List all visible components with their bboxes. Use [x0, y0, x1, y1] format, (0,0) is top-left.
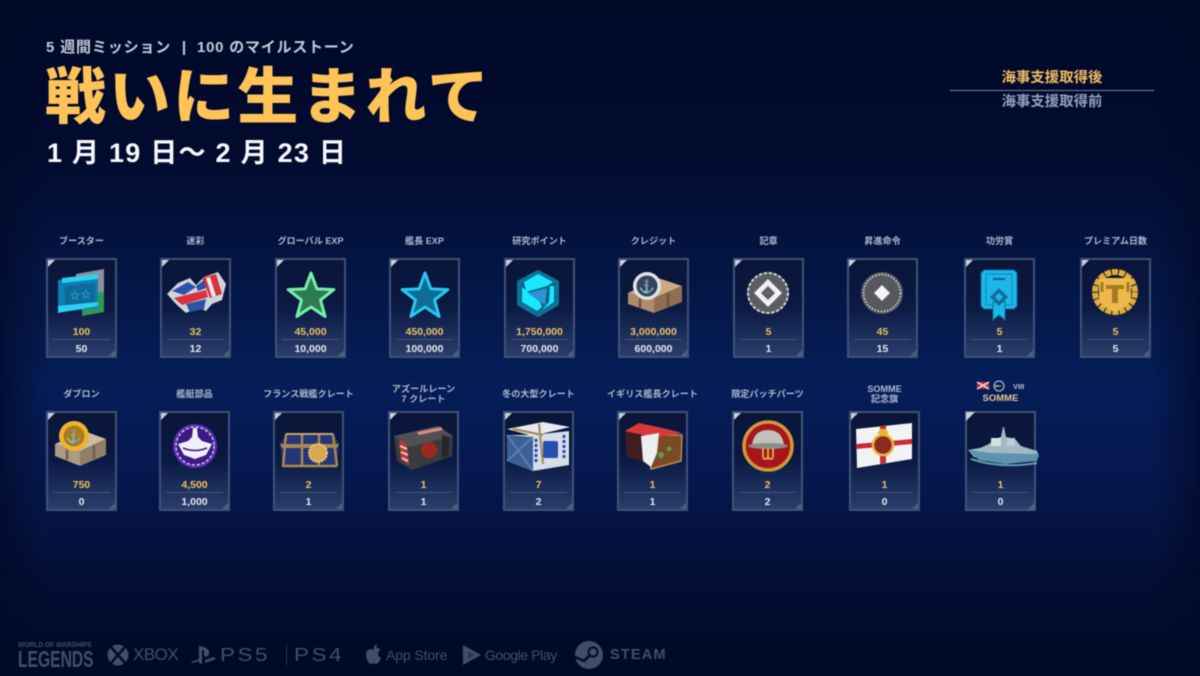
icon: ship components badge [172, 423, 218, 468]
logo: PlayStation 5 and 4: PS5 [220, 645, 270, 665]
reward: promotion orders [846, 235, 918, 358]
reward: premium days [1080, 235, 1152, 358]
icon: promotion order [860, 272, 904, 314]
reward: French battleship crate: 1 [306, 496, 311, 508]
reward: global EXP [274, 236, 346, 358]
reward: Somme commemorative flag: 0 [882, 496, 887, 508]
logo: World of Warships Legends: LEGENDS [18, 646, 94, 672]
icon: booster flags [57, 268, 105, 316]
icon: medal [746, 271, 790, 315]
logo: Xbox: XBOX [133, 645, 178, 664]
reward: French battleship crate: 2 [306, 479, 311, 491]
reward: commander EXP: 450,000 [406, 326, 443, 338]
icon: blue star [400, 270, 450, 319]
reward: doubloons [46, 388, 118, 512]
ship tier and name label [976, 380, 1024, 404]
reward: commander EXP [388, 236, 460, 358]
logo: World of Warships Legends: WORLD OF WARSHIPS [18, 642, 92, 649]
platform logos footer [18, 640, 668, 670]
legend: after support: 海事支援取得後 [1002, 70, 1102, 86]
reward: merit award: 5 [997, 326, 1002, 338]
legend: divider line [950, 90, 1154, 91]
icon: doubloons crate: ⚓ [66, 429, 82, 444]
subtitle [46, 38, 354, 56]
reward: camouflage: 32 [190, 326, 201, 338]
reward: French battleship crate: フランス戦艦クレート [263, 389, 354, 399]
reward: ship components: 艦艇部品 [176, 389, 213, 399]
reward: British commander crate: イギリス艦長クレート [607, 389, 698, 399]
reward: camouflage [160, 236, 232, 358]
icon: green star [286, 270, 336, 319]
reward: doubloons: 0 [79, 496, 84, 508]
legend [950, 68, 1154, 110]
reward: promotion orders: 45 [877, 326, 888, 338]
reward: camouflage: 12 [190, 343, 201, 355]
reward: doubloons: ダブロン [63, 389, 100, 399]
title: 戦いに生まれて [45, 63, 492, 131]
reward: British commander crate: 1 [650, 496, 655, 508]
reward: Azur Lane 7 crate: 1 [421, 479, 426, 491]
legend: before support: 海事支援取得前 [1002, 94, 1102, 110]
reward: Somme commemorative flag [848, 384, 920, 512]
reward: promotion orders: 昇進命令 [864, 236, 901, 246]
ship tier and name label: VIII [1012, 382, 1024, 391]
reward: winter large crate: 冬の大型クレート [502, 389, 575, 399]
reward: ship Somme [964, 380, 1040, 512]
reward: ship components: 4,500 [181, 479, 208, 491]
icon: destroyer Somme [965, 411, 1045, 481]
logo: Google Play [462, 644, 560, 666]
reward: medals: 5 [766, 326, 771, 338]
reward: camouflage: 迷彩 [186, 236, 205, 246]
icon: credits crate: ⚓ [639, 279, 655, 294]
subtitle: 5 週間ミッション [46, 39, 171, 56]
reward: premium days: プレミアム日数 [1084, 236, 1147, 246]
logo: App Store [365, 644, 449, 666]
reward: Somme commemorative flag: 記念旗 [871, 394, 898, 404]
reward: British commander crate [607, 388, 698, 512]
logo: PlayStation 5 and 4 [190, 644, 352, 666]
reward: research points [504, 235, 576, 358]
reward: global EXP: グローバル EXP [277, 236, 344, 246]
icon: credits crate [627, 271, 683, 314]
subtitle: 100 のマイルストーン [197, 39, 354, 56]
reward: Azur Lane 7 crate: アズールレーン [392, 384, 455, 394]
logo: Steam [575, 641, 668, 669]
reward: booster: 100 [73, 326, 90, 338]
reward: premium days: 5 [1113, 326, 1118, 338]
reward: credits [618, 236, 690, 358]
logo: App Store: App Store [386, 647, 447, 663]
date range: 1 月 19 日～ 2 月 23 日 [47, 138, 347, 168]
reward: ship Somme: 1 [998, 479, 1003, 491]
reward: winter large crate: 2 [536, 496, 541, 508]
icon: doubloons crate [54, 420, 107, 466]
reward: limited patch parts: 2 [765, 496, 770, 508]
reward: merit award: 功労賞 [986, 236, 1013, 246]
logo: Google Play: Google Play [485, 647, 557, 663]
reward: medals: 1 [766, 343, 771, 355]
reward: medals [732, 235, 804, 358]
reward: Somme commemorative flag: SOMME [867, 384, 902, 394]
reward: commander EXP: 100,000 [406, 343, 443, 355]
reward: winter large crate: 7 [536, 479, 541, 491]
reward: commander EXP: 艦長 EXP [405, 236, 444, 246]
reward: doubloons: 750 [73, 479, 90, 491]
reward: ship components [158, 388, 230, 512]
reward: Somme commemorative flag: 1 [882, 479, 887, 491]
logo: PlayStation 5 and 4: PS4 [294, 645, 344, 665]
icon: Somme flag [855, 422, 913, 469]
reward: global EXP: 45,000 [294, 326, 327, 338]
reward: Azur Lane 7 crate [388, 384, 460, 512]
reward: booster: ブースター [59, 236, 104, 246]
reward: booster [46, 235, 118, 358]
icon: French chest [280, 432, 340, 468]
reward: merit award: 1 [997, 343, 1002, 355]
reward: premium days: 5 [1113, 343, 1118, 355]
reward: global EXP: 10,000 [294, 343, 327, 355]
reward: French battleship crate [263, 388, 354, 512]
reward: credits: 3,000,000 [630, 326, 677, 338]
logo: Xbox [107, 644, 178, 666]
icon: camouflage [166, 272, 227, 314]
reward: research points: 研究ポイント [512, 236, 567, 246]
icon: British crate [624, 422, 684, 470]
reward: ship components: 1,000 [181, 496, 208, 508]
reward: limited patch parts [731, 388, 804, 512]
icon: research hexagon [516, 270, 560, 318]
reward: booster: 50 [76, 343, 87, 355]
reward: Azur Lane 7 crate: 7 クレート [402, 394, 445, 404]
icon: booster flags: ☆ [81, 289, 91, 301]
icon: booster flags: ☆ [70, 290, 80, 302]
icon: Azur Lane crate [394, 426, 454, 470]
logo: Steam: STEAM [610, 647, 667, 663]
reward: limited patch parts: 限定パッチパーツ [731, 389, 804, 399]
reward: medals: 記章 [759, 236, 778, 246]
reward: research points: 700,000 [521, 343, 558, 355]
reward: ship Somme: 0 [998, 496, 1003, 508]
reward: British commander crate: 1 [650, 479, 655, 491]
reward: winter large crate [502, 388, 575, 512]
reward: merit award [964, 235, 1036, 358]
reward: promotion orders: 15 [877, 343, 888, 355]
ship tier and name label: SOMME [983, 393, 1018, 404]
reward: credits: クレジット [631, 236, 676, 246]
icon: premium laurel shield [1091, 268, 1139, 316]
reward: Azur Lane 7 crate: 1 [421, 496, 426, 508]
icon: winter crate [506, 421, 570, 472]
icon: helmet patch [742, 420, 794, 472]
reward: research points: 1,750,000 [516, 326, 563, 338]
icon: certificate [980, 269, 1018, 322]
reward: credits: 600,000 [635, 343, 672, 355]
reward: limited patch parts: 2 [765, 479, 770, 491]
